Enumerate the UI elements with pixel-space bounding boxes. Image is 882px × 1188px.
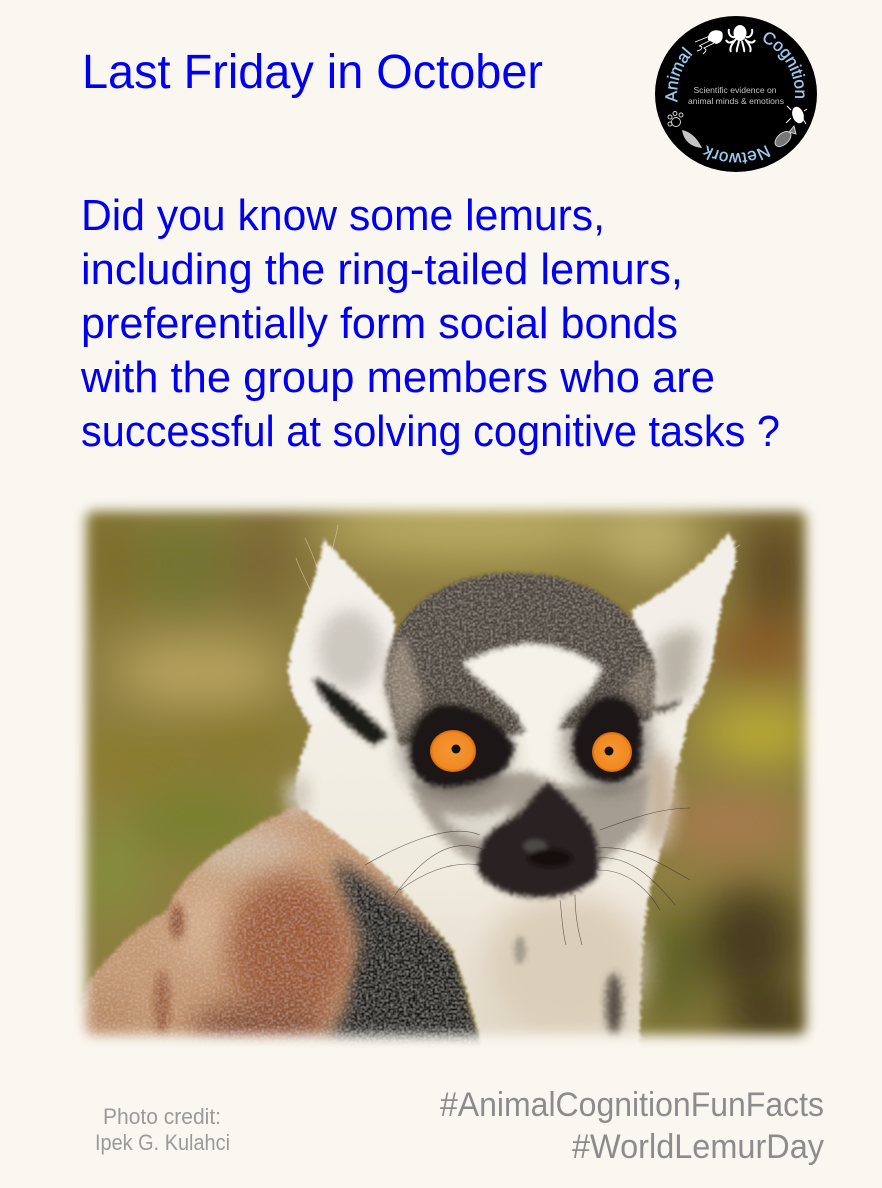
lemur ear fur wisps (296, 525, 740, 590)
photo background bokeh (60, 490, 830, 1060)
icon: jellyfish (695, 30, 723, 54)
question text block (80, 191, 780, 456)
nose (477, 782, 599, 897)
lemur nose highlight (523, 839, 572, 867)
lemur crown (385, 573, 655, 745)
logo arc text: Animal (665, 46, 692, 102)
left eye (430, 730, 476, 772)
right eye patch (572, 697, 642, 782)
icon: feather (682, 130, 702, 148)
eye patch halos (400, 704, 510, 796)
right ear inner (655, 630, 700, 712)
logo tagline (688, 85, 784, 106)
question text block: including the ring-tailed lemurs, (81, 245, 683, 294)
icon: paw (668, 112, 683, 126)
logo arc text (665, 32, 806, 164)
logo tagline: Scientific evidence on (693, 85, 777, 95)
title: Last Friday in October: Last Friday in October (82, 46, 543, 99)
logo: Animal Cognition Network (655, 16, 817, 172)
photo credit: Photo credit: (103, 1104, 221, 1129)
photo credit (95, 1104, 230, 1155)
forehead blaze (459, 639, 606, 736)
left ear dark stripe (313, 678, 388, 746)
icon: beetle (786, 105, 807, 125)
lemur face markings (400, 643, 652, 897)
question text block: preferentially form social bonds (81, 299, 678, 348)
logo tagline: animal minds & emotions (688, 96, 784, 106)
hashtags: #AnimalCognitionFunFacts (440, 1086, 824, 1124)
right eye (592, 732, 632, 772)
photo: ring-tailed lemur (60, 490, 830, 1070)
hashtags: #WorldLemurDay (572, 1128, 824, 1166)
left eye patch (410, 705, 515, 787)
muzzle grey (410, 772, 650, 865)
icon: octopus (726, 25, 755, 52)
hashtags (440, 1086, 824, 1166)
neck and cheeks (294, 712, 690, 1044)
logo arc text: Cognition (764, 32, 806, 98)
lemur body fur (80, 806, 478, 1044)
lemur whiskers (365, 808, 690, 945)
right ear (632, 532, 736, 740)
lemur ears and neck (286, 532, 736, 1060)
left ear inner (318, 610, 382, 690)
photo credit: Ipek G. Kulahci (95, 1130, 230, 1155)
icon: fish (772, 126, 796, 149)
question text block: with the group members who are (80, 353, 715, 402)
lemur eyes (430, 730, 632, 772)
logo arc text: Network (702, 145, 771, 164)
left ear (288, 538, 395, 750)
question text block: Did you know some lemurs, (81, 191, 605, 240)
question text block: successful at solving cognitive tasks ? (81, 407, 780, 456)
